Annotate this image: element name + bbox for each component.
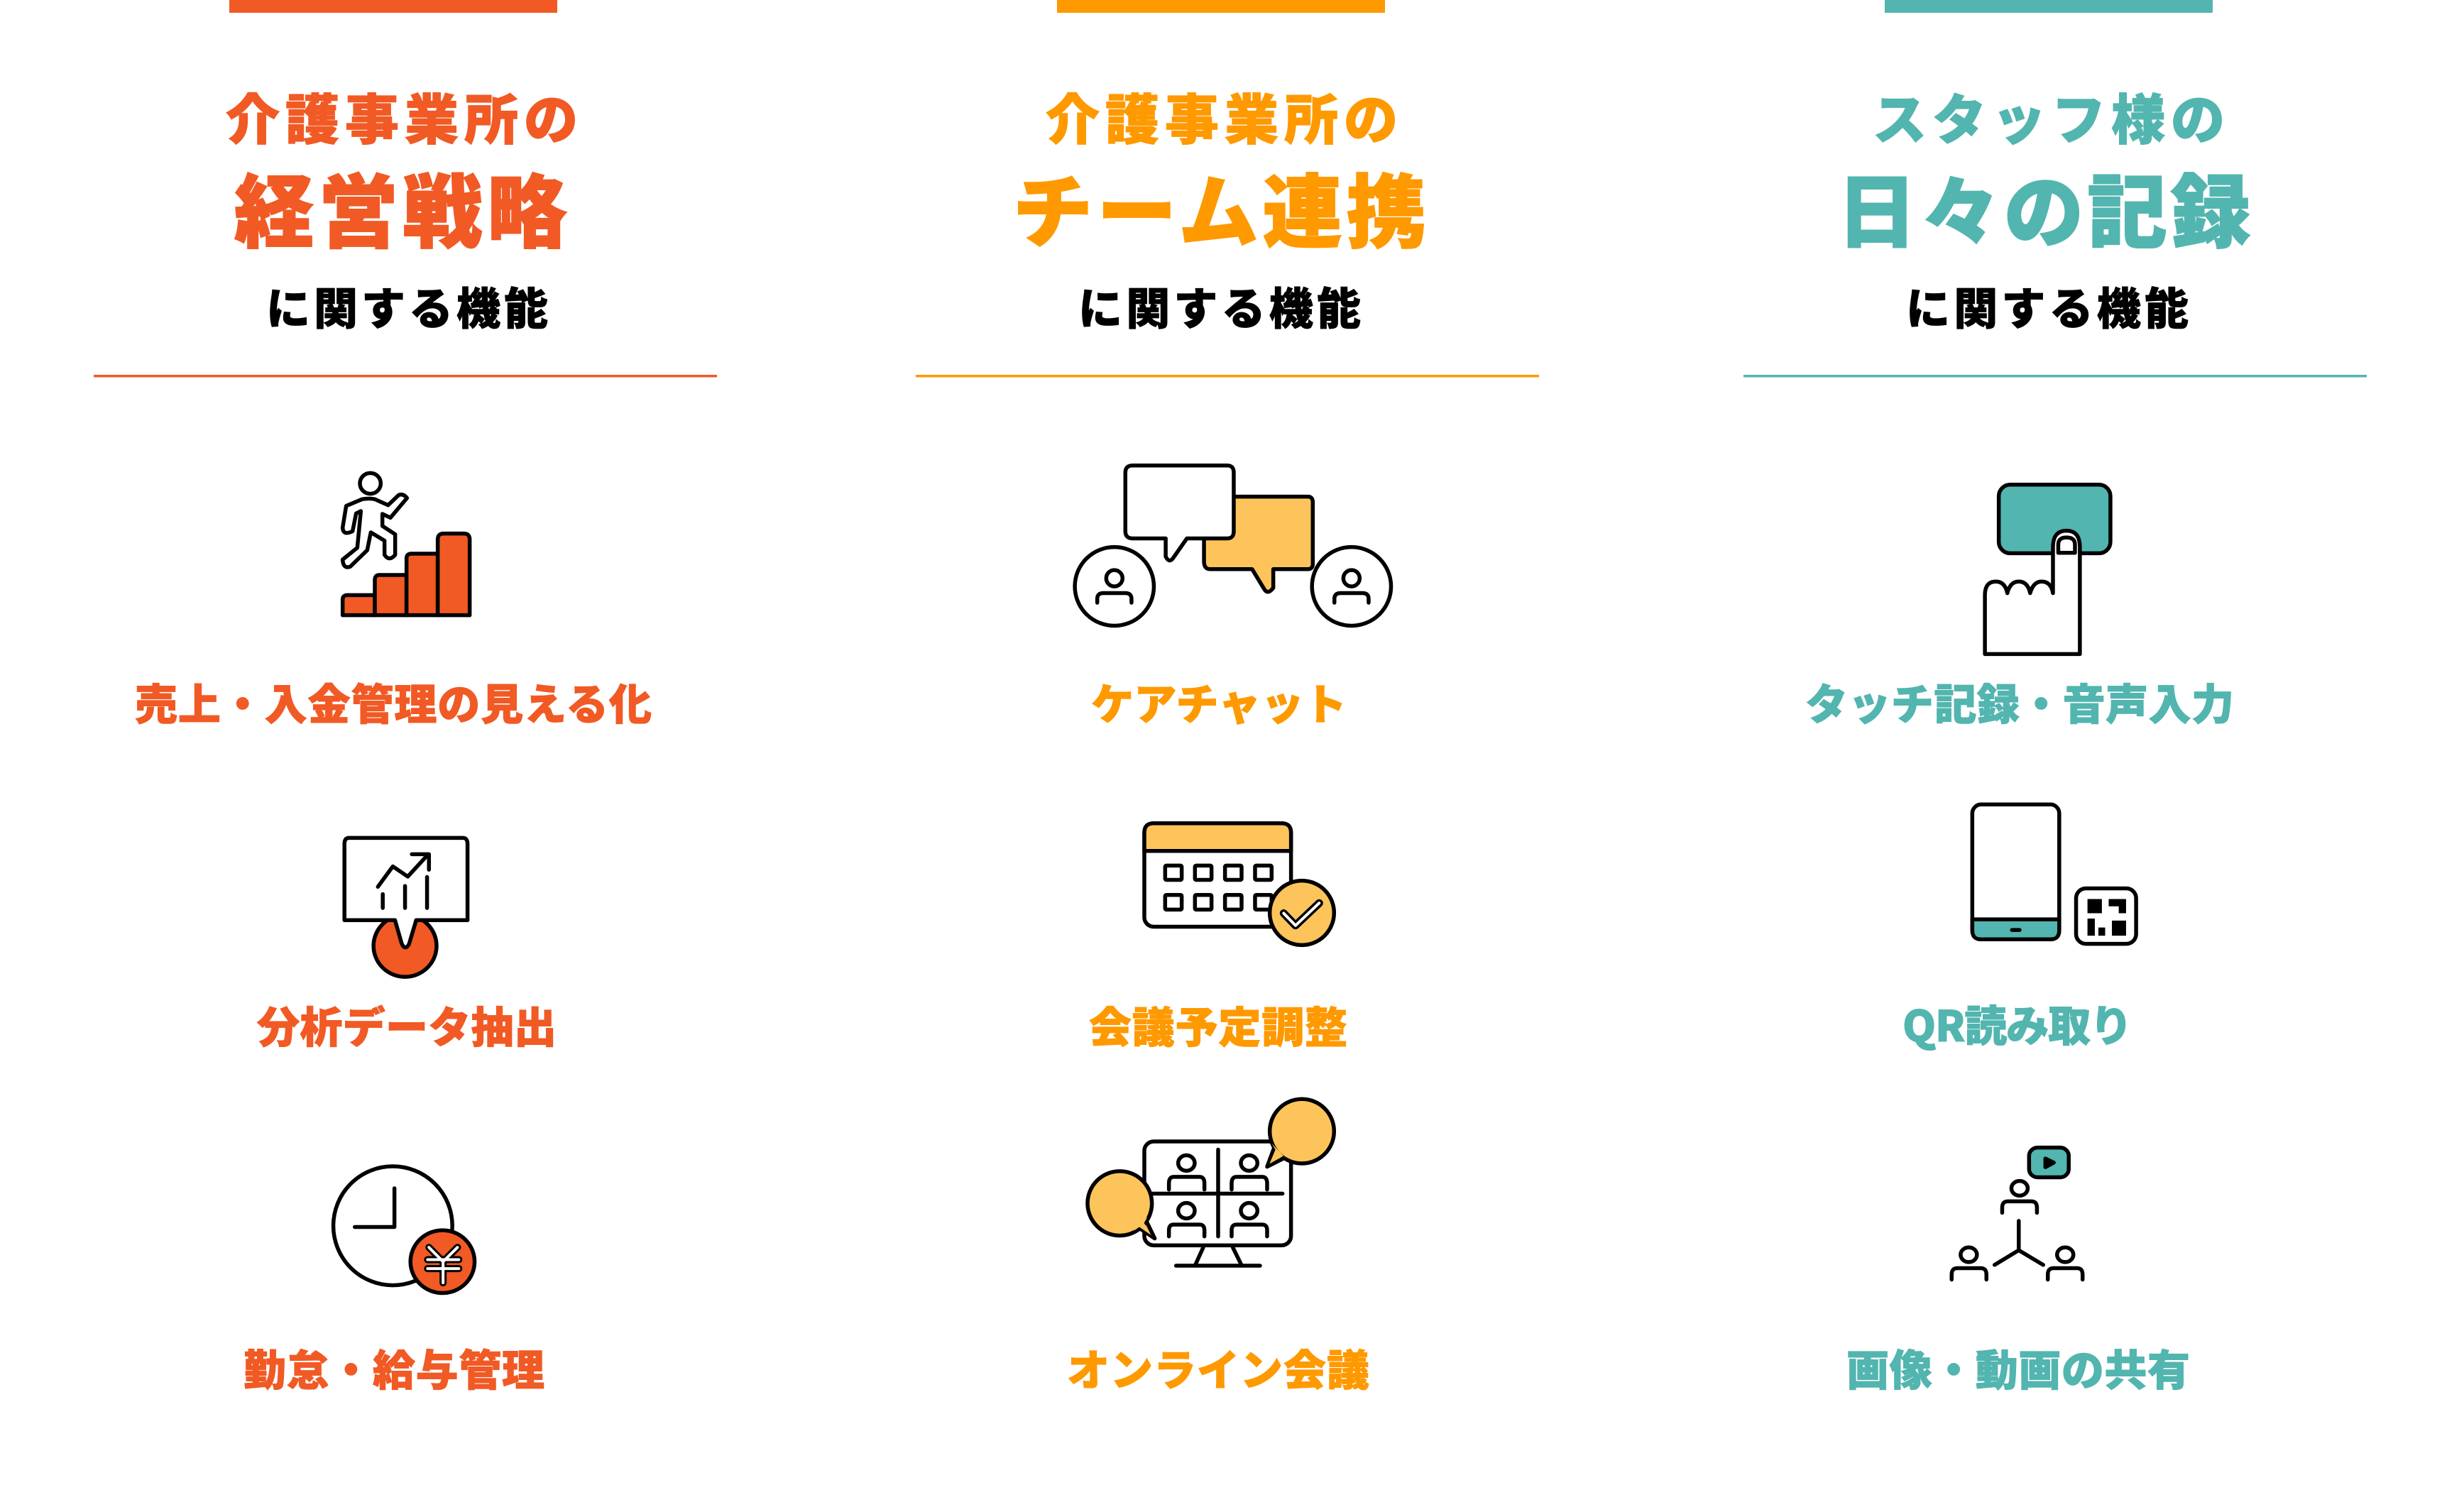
top accent bar orange bbox=[1057, 0, 1385, 13]
panel: team collaboration bbox=[916, 0, 1539, 1398]
icon: calendar with check mark bbox=[1144, 823, 1334, 945]
heading large: 経営戦略: 経営戦略 bbox=[234, 149, 566, 264]
label: 分析データ抽出: 分析データ抽出 bbox=[257, 994, 557, 1056]
heading small: 介護事業所の: 介護事業所の bbox=[1046, 77, 1398, 155]
panel: daily staff records bbox=[1743, 0, 2367, 1398]
icon: person climbing bar steps bbox=[343, 473, 470, 615]
icon: tablet and QR code bbox=[1972, 804, 2136, 944]
heading large: 日々の記録: 日々の記録 bbox=[1837, 149, 2250, 264]
label: 売上・入金管理の見える化: 売上・入金管理の見える化 bbox=[135, 671, 652, 733]
label: 勤怠・給与管理: 勤怠・給与管理 bbox=[243, 1337, 544, 1398]
heading small: スタッフ様の: スタッフ様の bbox=[1873, 77, 2225, 155]
subheading: に関する機能: に関する機能 bbox=[1906, 273, 2189, 337]
icon: clock with yen coin bbox=[334, 1166, 475, 1293]
label: ケアチャット: ケアチャット bbox=[1091, 671, 1347, 733]
label: 画像・動画の共有: 画像・動画の共有 bbox=[1846, 1337, 2190, 1398]
label: 会議予定調整: 会議予定調整 bbox=[1089, 994, 1347, 1056]
subheading: に関する機能: に関する機能 bbox=[266, 273, 548, 337]
panel: management strategy bbox=[94, 0, 717, 1398]
heading small: 介護事業所の: 介護事業所の bbox=[226, 77, 578, 155]
icon: finger touching button bbox=[1985, 485, 2110, 654]
label: タッチ記録・音声入力: タッチ記録・音声入力 bbox=[1805, 671, 2234, 733]
label: QR読み取り: QR読み取り bbox=[1902, 992, 2132, 1054]
top accent bar teal bbox=[1885, 0, 2213, 13]
label: オンライン会議: オンライン会議 bbox=[1067, 1337, 1369, 1398]
heading large: チーム連携: チーム連携 bbox=[1013, 149, 1426, 264]
icon: chat bubbles between two people bbox=[1075, 466, 1391, 626]
icon: people sharing a video bbox=[1951, 1148, 2083, 1280]
icon: chart presentation with pin bbox=[344, 838, 468, 977]
top accent bar red bbox=[229, 0, 557, 13]
subheading: に関する機能: に関する機能 bbox=[1078, 273, 1361, 337]
icon: online meeting monitor with speech bubbles bbox=[1088, 1099, 1334, 1266]
